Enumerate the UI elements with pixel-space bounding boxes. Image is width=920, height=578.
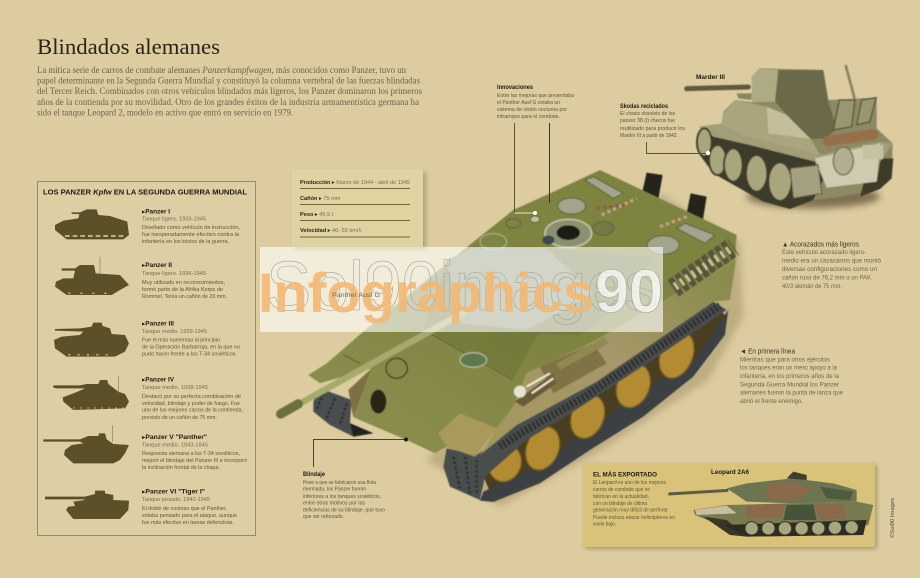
panel text: con un blindaje de última bbox=[593, 501, 647, 507]
Marder III tank bbox=[687, 65, 893, 209]
text: En primera línea: los tanques eran un mero apoyo a la bbox=[740, 364, 837, 372]
turret hatch ring bbox=[542, 219, 592, 247]
panel text: carros de combate que se bbox=[593, 487, 650, 493]
text: Panzer V Panther: Tanque medio. 1943-1945 bbox=[142, 442, 208, 448]
Panther label: Panther Ausf G bbox=[332, 293, 380, 299]
side tools and figure marking bbox=[514, 340, 607, 407]
callout: Blindaje: entre otros motivos por las bbox=[303, 500, 365, 506]
watermark band bbox=[258, 247, 663, 332]
silhouette: Panzer III bbox=[54, 323, 129, 357]
panel heading: EL MÁS EXPORTADO bbox=[593, 470, 657, 478]
intro text: años de la contienda por su movilidad. Otro de los grandes éxitos de la industria armamentística germana ha bbox=[37, 97, 420, 108]
panel: Panzer models bbox=[38, 182, 256, 536]
text: En primera línea: abrió el frente enemigo. bbox=[740, 398, 803, 405]
text: En primera línea: alemanes fueron la punta de lanza que bbox=[740, 390, 843, 396]
text: Panzer II: Muy utilizado en reconocimientos, bbox=[142, 280, 225, 286]
callout: Skodas reciclados: reutilizado para producir los bbox=[620, 126, 685, 132]
text: Panzer IV: Tanque medio. 1938-1945 bbox=[142, 385, 208, 391]
panel: Leopard bbox=[583, 463, 877, 549]
text: Acorazados más ligeros: diversas configuraciones como un bbox=[782, 266, 877, 273]
text: Panzer V Panther: la inclinación frontal de la chapa. bbox=[142, 465, 220, 471]
callout: Innovaciones bbox=[497, 85, 574, 215]
text: Panzer III: ▸Panzer III bbox=[142, 322, 174, 328]
text: Panzer I bbox=[142, 210, 240, 245]
callout: Blindaje: deficiencias de su blindaje, que tuvo bbox=[303, 508, 385, 514]
text: Panzer IV: provisto de un cañón de 75 mm. bbox=[142, 415, 217, 421]
main tank: Panther bbox=[281, 170, 743, 507]
title: Blindados alemanes bbox=[37, 34, 220, 59]
text: Panzer III: de la Operación Barbarroja, en la que no bbox=[142, 344, 240, 350]
text: Panzer IV: Destacó por su perfecta combinación de bbox=[142, 394, 241, 400]
text: Acorazados más ligeros: Este vehículo acorazado ligero- bbox=[782, 249, 866, 256]
gun barrel bbox=[281, 311, 467, 414]
text: Acorazados más ligeros: ▲ Acorazados más ligeros bbox=[782, 242, 859, 248]
callout: Innovaciones: Innovaciones bbox=[497, 85, 534, 91]
spec box: Peso ▸ 45,5 t bbox=[300, 212, 334, 218]
callout: Innovaciones: sistema de visión nocturna por bbox=[497, 107, 567, 113]
text: Panzer I: infantería en los inicios de la guerra. bbox=[142, 239, 229, 245]
text: Panzer I: Tanque ligero. 1933-1945 bbox=[142, 216, 206, 222]
text: Panzer VI Tiger I bbox=[142, 490, 237, 526]
hull top bbox=[308, 170, 737, 457]
turret bbox=[423, 248, 653, 335]
spare track links bbox=[673, 247, 733, 288]
label: Marder III: Marder III bbox=[696, 75, 725, 81]
text: En primera línea: ◄ En primera línea bbox=[740, 348, 795, 356]
text: Panzer I: fue inesperadamente efectivo contra la bbox=[142, 232, 239, 238]
label: Leopard 2A6: Leopard 2A6 bbox=[711, 470, 750, 476]
callout: Skodas reciclados bbox=[620, 104, 710, 155]
text: En primera línea: Segunda Guerra Mundial los Panzer bbox=[740, 382, 840, 388]
spec box: Producción ▸ Marzo de 1944 - abril de 1945 bbox=[300, 180, 410, 186]
callout: Skodas reciclados: Skodas reciclados bbox=[620, 104, 669, 110]
callout: Skodas reciclados: Marder III a partir de 1942. bbox=[620, 133, 678, 139]
callout: Blindaje: que ser reforzado. bbox=[303, 514, 344, 520]
panel text: Puede incluso atacar helicópteros en bbox=[593, 515, 675, 521]
text: Panzer V Panther: mejoró el blindaje del Panzer III e incorporó bbox=[142, 458, 247, 464]
engine deck gratings bbox=[480, 177, 715, 254]
text: Panzer V Panther: Respuesta alemana a los T-34 soviéticos, bbox=[142, 451, 240, 457]
text: Panzer III: pudo hacer frente a los T-34 soviéticos. bbox=[142, 352, 237, 358]
silhouette: Panzer IV bbox=[53, 376, 129, 410]
road wheels bbox=[483, 327, 700, 487]
text: Panzer I: Diseñado como vehículo de instrucción, bbox=[142, 225, 240, 231]
callout: Skodas reciclados: El chasis obsoleto de los bbox=[620, 111, 675, 117]
text: Panzer IV: uno de los mejores carros de la contienda, bbox=[142, 408, 243, 414]
upper track run bbox=[443, 302, 727, 500]
text: Panzer VI Tiger I: El doble de costoso que el Panther, bbox=[142, 506, 227, 512]
watermark Infographics: Infographics bbox=[258, 261, 594, 324]
text: Panzer I: ▸Panzer I bbox=[142, 210, 170, 216]
intro text: del Tercer Reich. Combinados con otros vehículos blindados más ligeros, los Panzer dominaron los primeros bbox=[37, 86, 422, 97]
silhouette: Panzer I bbox=[55, 209, 129, 239]
intro text: sido el tanque Leopard 2, modelo en activo que entró en servicio en 1979. bbox=[37, 107, 293, 118]
lower track run bbox=[480, 310, 728, 502]
silhouette base bbox=[697, 68, 893, 209]
text: Panzer II: formó parte de la Afrika Korps de bbox=[142, 287, 223, 293]
left track bbox=[313, 388, 373, 437]
text: Panzer II: Tanque ligero. 1936-1945 bbox=[142, 271, 206, 277]
silhouette: Panzer VI Tiger I bbox=[45, 491, 129, 519]
callout: Blindaje: Blindaje bbox=[303, 472, 326, 478]
running gear interior bbox=[477, 303, 727, 500]
silhouette: Panzer V Panther bbox=[43, 425, 129, 463]
text: Panzer III bbox=[142, 322, 240, 358]
text: Panzer IV bbox=[142, 378, 243, 421]
text: Panzer III: Fue el más numeroso al principio bbox=[142, 338, 220, 344]
panel text bbox=[593, 480, 675, 528]
callout: Blindaje: inferiores a los tanques soviéticos, bbox=[303, 494, 381, 500]
text: Panzer V Panther: ▸Panzer V "Panther" bbox=[142, 435, 207, 441]
text: En primera línea: Mientras que para otros ejércitos bbox=[740, 356, 830, 364]
callout: Innovaciones: Entre las mejoras que presentaba bbox=[497, 93, 574, 99]
intro text bbox=[37, 65, 422, 118]
spec box bbox=[292, 169, 426, 250]
callout: Innovaciones: infrarrojos para el combate. bbox=[497, 114, 560, 120]
text: Panzer II bbox=[142, 263, 227, 300]
panel heading: LOS PANZER Kpfw EN LA SEGUNDA GUERRA MUNDIAL bbox=[43, 188, 248, 196]
watermark 90: 90 bbox=[595, 258, 663, 325]
front glacis weathering bbox=[343, 332, 540, 457]
spec box: Cañón ▸ 75 mm bbox=[300, 196, 341, 202]
panel text: El Leopard es uno de los mejores bbox=[593, 480, 666, 486]
text: Acorazados más ligeros: medio era un cazacarros que montó bbox=[782, 258, 881, 264]
text: En primera línea bbox=[740, 348, 843, 405]
spec box: Velocidad ▸ 46- 55 km/h bbox=[300, 228, 362, 234]
text: Panzer II: Rommel. Tenía un cañón de 20 mm. bbox=[142, 294, 227, 300]
intro text: papel determinante en la Segunda Guerra Mundial y constituyó la columna vertebral de las fuerzas blindadas bbox=[37, 76, 420, 87]
intro text: La mítica serie de carros de combate alemanes Panzerkampfwagen, más conocidos como Panzer, tuvo un bbox=[37, 65, 406, 76]
text: En primera línea: infantería, en los primeros años de la bbox=[740, 373, 839, 380]
watermark outline text: Sol90images bbox=[266, 247, 658, 325]
text: Acorazados más ligeros bbox=[782, 242, 881, 290]
callout: Blindaje: Pese a que se fabricaron una flota bbox=[303, 480, 376, 486]
callout: Skodas reciclados: panzer 38 (t) checos fue bbox=[620, 118, 675, 124]
Leopard tank bbox=[668, 472, 873, 537]
text: Panzer VI Tiger I: Tanque pesado. 1942-1945 bbox=[142, 497, 210, 503]
text: Panzer VI Tiger I: fue más efectivo en tareas defensivas. bbox=[142, 520, 234, 526]
tank shadow bbox=[427, 193, 743, 507]
callout: Blindaje bbox=[303, 438, 408, 520]
panel text: vuelo bajo. bbox=[593, 522, 616, 528]
text: Acorazados más ligeros: cañón ruso de 76,2 mm o un PAK bbox=[782, 274, 872, 282]
text: Panzer VI Tiger I: ▸Panzer VI "Tiger I" bbox=[142, 490, 205, 496]
rear deck paint marks bbox=[597, 198, 687, 227]
callout: Blindaje: mermada, los Panzer fueron bbox=[303, 486, 366, 492]
panel text: fabrican en la actualidad, bbox=[593, 494, 649, 500]
credit: ©Sol90 Images bbox=[889, 498, 896, 538]
panel text: generación muy difícil de perforar. bbox=[593, 508, 669, 514]
rear exhausts bbox=[642, 173, 707, 222]
text: Panzer VI Tiger I: estaba pensado para el ataque, aunque bbox=[142, 513, 237, 519]
callout: Innovaciones: el Panther Ausf G estaba un bbox=[497, 100, 560, 106]
text: Panzer II: ▸Panzer II bbox=[142, 263, 172, 269]
text: Panzer V Panther bbox=[142, 435, 247, 471]
hull side bbox=[480, 260, 736, 455]
text: Panzer IV: velocidad, blindaje y poder de fuego. Fue bbox=[142, 401, 240, 407]
text: Panzer IV: ▸Panzer IV bbox=[142, 378, 174, 384]
silhouette: Panzer II bbox=[55, 257, 129, 295]
text: Acorazados más ligeros: 40/3 alemán de 75 mm. bbox=[782, 283, 842, 290]
text: Panzer III: Tanque medio. 1939-1945 bbox=[142, 329, 207, 335]
